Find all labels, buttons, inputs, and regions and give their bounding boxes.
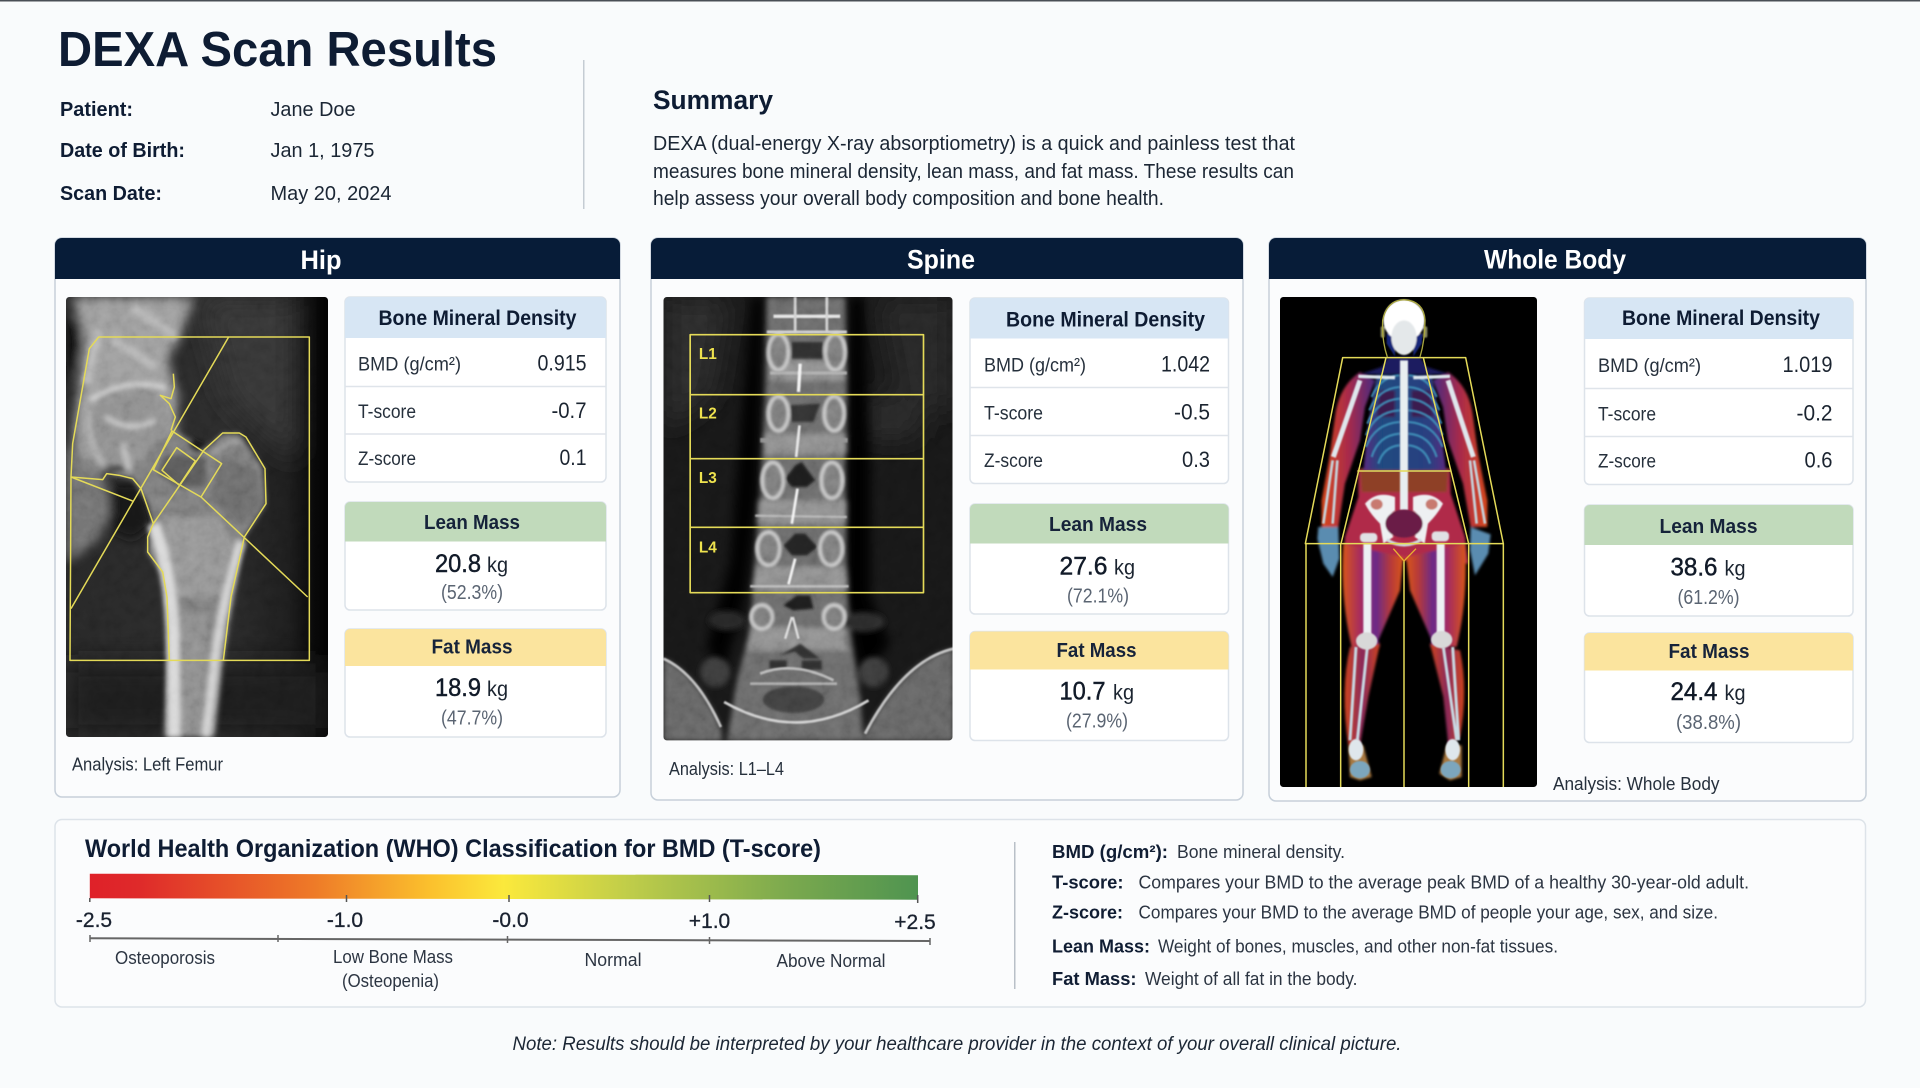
Z-score definition: Z-score: — [1052, 902, 1123, 922]
hip heading: Hip — [300, 245, 342, 275]
scale values: +2.5 — [894, 911, 936, 934]
spine bone mineral density table: 0.3 — [1182, 447, 1210, 472]
hip fat mass card: 18.9 — [435, 674, 481, 702]
hip x-ray image — [66, 297, 328, 737]
whole body bone mineral density table — [1584, 298, 1853, 484]
hip header bar — [55, 238, 620, 279]
patient name: Patient: — [60, 99, 133, 121]
spine bone mineral density table: Bone Mineral Density — [1006, 308, 1205, 332]
scan date: May 20, 2024 — [270, 182, 392, 205]
summary text: measures bone mineral density, lean mass, and fat mass. These results can — [653, 161, 1294, 183]
whole body heading: Whole Body — [1484, 244, 1626, 274]
spine lean mass card: (72.1%) — [1067, 586, 1129, 608]
hip fat mass card: Fat Mass — [432, 636, 512, 658]
summary text — [653, 133, 1295, 210]
whole body bone mineral density table: -0.2 — [1796, 400, 1832, 426]
hip analysis note: Analysis: Left Femur — [72, 754, 223, 774]
scan date: Scan Date: — [60, 183, 162, 205]
whole body bone mineral density table: Bone Mineral Density — [1622, 307, 1820, 330]
summary — [653, 85, 1295, 210]
T-score definition: T-score: — [1052, 872, 1124, 892]
whole body bone mineral density table: 0.6 — [1804, 448, 1832, 472]
spine bone mineral density table: 1.042 — [1161, 352, 1210, 376]
whole body fat mass card: Fat Mass — [1668, 641, 1750, 663]
date of birth: Jan 1, 1975 — [270, 139, 374, 162]
whole body header bar — [1269, 238, 1866, 279]
category labels: (Osteopenia) — [342, 971, 439, 991]
hip lean mass card: 20.8 — [435, 550, 481, 578]
whole body fat mass card — [1584, 633, 1853, 742]
whole body analysis note: Analysis: Whole Body — [1553, 774, 1720, 794]
spine lean mass card — [970, 504, 1228, 614]
spine bone mineral density table: T-score — [984, 404, 1043, 424]
spine fat mass card: (27.9%) — [1066, 710, 1128, 732]
scale values — [76, 909, 936, 934]
spine fat mass card: 10.7 — [1060, 678, 1106, 706]
classification panel frame — [55, 820, 1866, 1007]
hip lean mass card: (52.3%) — [441, 582, 503, 604]
category labels: Osteoporosis — [115, 948, 215, 968]
panel: hip — [55, 238, 620, 797]
scale values: -1.0 — [327, 909, 363, 932]
hip lean mass card: kg — [487, 554, 508, 577]
hip bone mineral density table: Z-score — [358, 449, 416, 470]
WHO heading: World Health Organization (WHO) Classification for BMD (T-score) — [85, 835, 821, 863]
whole body bone mineral density table: T-score — [1598, 404, 1656, 426]
hip fat mass card: (47.7%) — [441, 708, 503, 730]
spine x-ray image — [664, 297, 953, 741]
fat mass definition: Fat Mass: — [1052, 969, 1136, 989]
whole body lean mass card: kg — [1724, 558, 1746, 580]
whole body lean mass card: 38.6 — [1670, 554, 1718, 582]
hip lean mass card: Lean Mass — [424, 512, 520, 534]
spine region overlay L1-L4 — [690, 335, 923, 593]
whole body bone mineral density table: Z-score — [1598, 452, 1656, 472]
whole body panel frame — [1269, 238, 1866, 801]
spine heading: Spine — [907, 244, 975, 274]
hip bone mineral density table — [345, 297, 606, 482]
lean mass definition: Lean Mass: — [1052, 936, 1150, 956]
panel: spine — [651, 238, 1243, 800]
hip bone mineral density table: BMD (g/cm²) — [358, 354, 461, 376]
scan date — [60, 182, 392, 205]
category labels: Low Bone Mass — [333, 947, 453, 967]
BMD definition: Bone mineral density. — [1177, 842, 1345, 862]
spine bone mineral density table: Z-score — [984, 451, 1043, 472]
spine fat mass card: kg — [1113, 682, 1134, 704]
spine analysis note: Analysis: L1–L4 — [669, 759, 784, 779]
spine bone mineral density table — [970, 298, 1228, 484]
panel: WHO classification and definitions — [55, 820, 1866, 1007]
T-score definition: Compares your BMD to the average peak BMD of a healthy 30-year-old adult. — [1138, 872, 1749, 892]
vertebra labels: L1 — [699, 346, 717, 363]
hip region overlay — [70, 337, 309, 660]
spine panel frame — [651, 238, 1243, 800]
T-score gradient scale — [76, 874, 936, 934]
title: DEXA Scan Results — [58, 23, 497, 77]
whole body bone mineral density table: 1.019 — [1782, 352, 1832, 377]
scale values: -2.5 — [76, 909, 112, 932]
spine lean mass card: kg — [1114, 556, 1135, 580]
date of birth — [60, 139, 374, 162]
BMD definition: BMD (g/cm²): — [1052, 842, 1168, 862]
classification axis — [90, 935, 930, 991]
summary heading: Summary — [653, 85, 773, 115]
body region overlay — [1305, 300, 1503, 787]
whole body fat mass card: kg — [1724, 682, 1746, 705]
hip lean mass card — [345, 502, 606, 610]
category labels: Above Normal — [776, 951, 886, 971]
hip bone mineral density table: Bone Mineral Density — [378, 307, 577, 330]
scale values: +1.0 — [689, 910, 730, 933]
patient details — [60, 98, 392, 205]
lean mass definition: Weight of bones, muscles, and other non-fat tissues. — [1158, 936, 1558, 956]
whole body lean mass card — [1584, 505, 1853, 616]
whole body fat mass card: (38.8%) — [1676, 712, 1741, 734]
spine bone mineral density table: BMD (g/cm²) — [984, 356, 1086, 376]
hip fat mass card — [345, 629, 606, 737]
hip bone mineral density table: -0.7 — [552, 398, 586, 423]
Z-score definition: Compares your BMD to the average BMD of people your age, sex, and size. — [1138, 902, 1718, 922]
spine lean mass card: Lean Mass — [1049, 514, 1147, 536]
vertebra labels: L2 — [699, 405, 717, 422]
spine lean mass card: 27.6 — [1060, 552, 1108, 580]
BMD definition — [1052, 842, 1345, 862]
panel: whole body — [1269, 238, 1866, 801]
whole body lean mass card: Lean Mass — [1660, 516, 1758, 538]
category labels: Normal — [584, 950, 642, 970]
hip bone mineral density table: 0.1 — [560, 445, 586, 470]
scale values: -0.0 — [492, 909, 529, 932]
date of birth: Date of Birth: — [60, 140, 185, 162]
fat mass definition — [1052, 969, 1358, 989]
hip panel frame — [55, 238, 620, 797]
spine bone mineral density table: -0.5 — [1174, 400, 1210, 424]
category labels — [115, 947, 886, 991]
vertebra labels: L3 — [699, 470, 717, 487]
definitions — [1052, 842, 1749, 989]
vertebra labels: L4 — [699, 539, 717, 556]
patient name: Jane Doe — [270, 98, 356, 121]
vertebra labels — [699, 346, 717, 556]
hip bone mineral density table: T-score — [358, 402, 416, 423]
summary text: DEXA (dual-energy X-ray absorptiometry) is a quick and painless test that — [653, 133, 1295, 155]
hip bone mineral density table: 0.915 — [538, 350, 586, 376]
whole body bone mineral density table: BMD (g/cm²) — [1598, 356, 1701, 377]
fat mass definition: Weight of all fat in the body. — [1145, 969, 1358, 989]
spine fat mass card: Fat Mass — [1056, 640, 1136, 662]
summary text: help assess your overall body composition and bone health. — [653, 188, 1164, 210]
spine fat mass card — [970, 632, 1228, 740]
whole body fat mass card: 24.4 — [1670, 678, 1718, 706]
hip fat mass card: kg — [487, 678, 508, 701]
whole body lean mass card: (61.2%) — [1678, 587, 1740, 609]
spine header bar — [651, 238, 1243, 279]
whole body scan image — [1280, 297, 1538, 787]
footnote: Note: Results should be interpreted by your healthcare provider in the context of your overall clinical picture. — [512, 1034, 1402, 1055]
patient name — [60, 98, 356, 121]
